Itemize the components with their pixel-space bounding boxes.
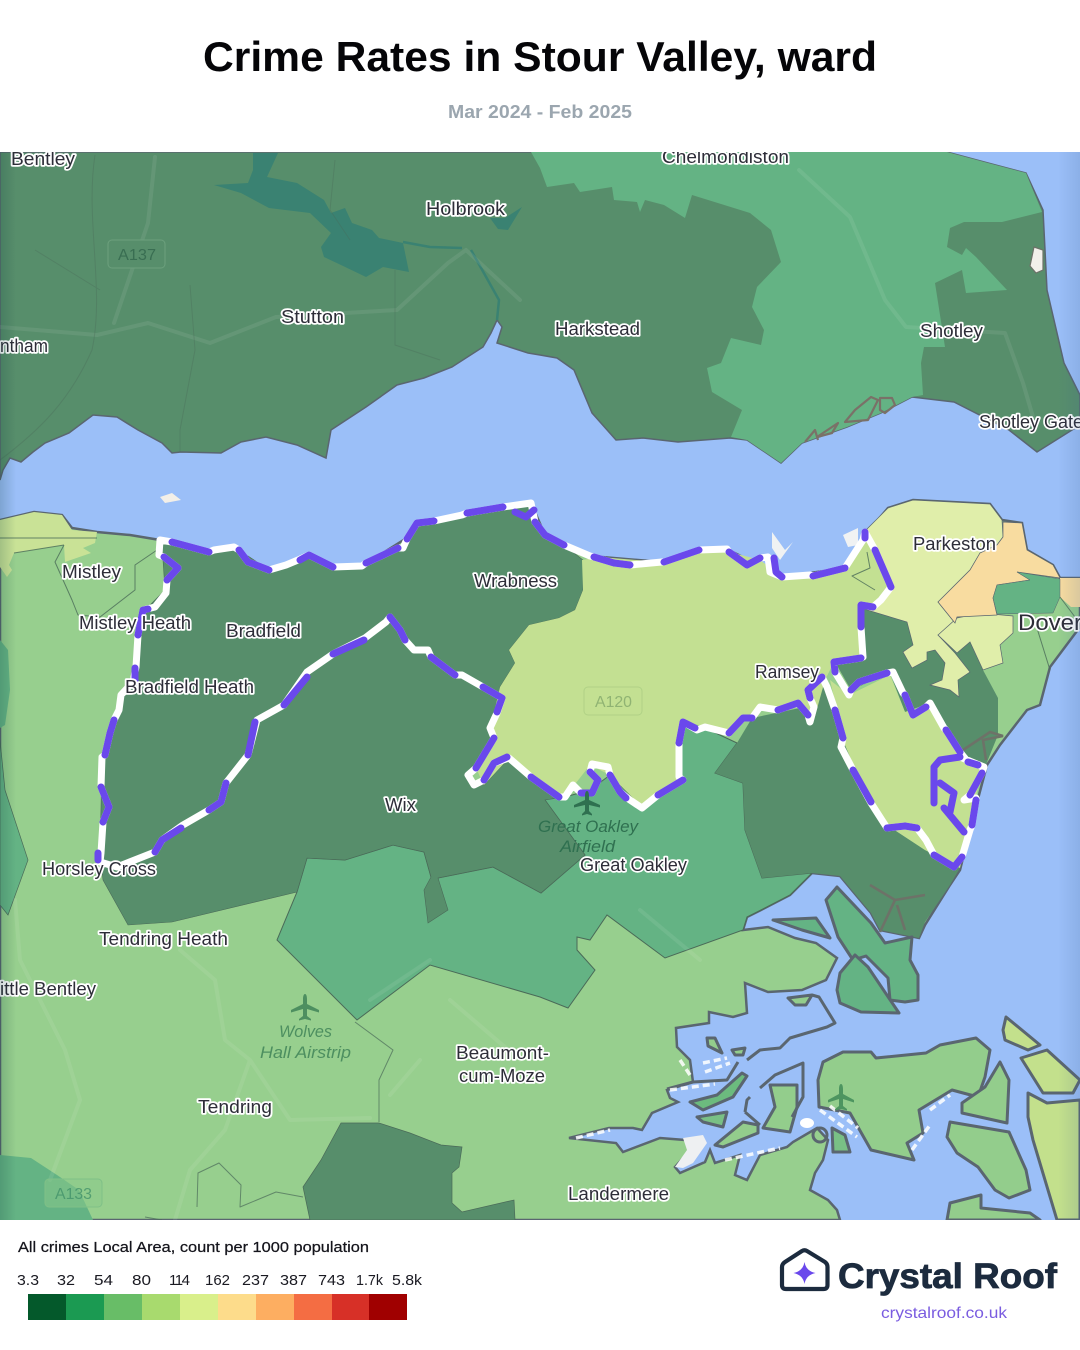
south-west corner mid green (0, 1155, 93, 1220)
label: Dover: Dover (1018, 610, 1080, 635)
north land: mid green ward (531, 152, 1042, 463)
label: Beaumont-cum-Moze: cum-Moze (459, 1066, 545, 1086)
title: Crime Rates in Stour Valley, ward (203, 33, 877, 80)
ring in marsh (813, 1128, 827, 1142)
label: Ramsey: Ramsey (755, 662, 819, 682)
label: Stutton: Stutton (281, 307, 344, 327)
reservoir: Alton Water (214, 153, 409, 277)
legend values: 114 (169, 1272, 190, 1289)
ward boundary: purple dashes (98, 507, 982, 867)
Dovercourt boundaries (852, 552, 1075, 670)
Dovercourt mid green patch (993, 572, 1060, 614)
Dovercourt orange area (938, 522, 1060, 623)
label: Landermere: Landermere (568, 1184, 669, 1204)
road badge: A120: A120 (595, 694, 632, 711)
bottom dark green ward (303, 1123, 515, 1220)
label: Wix: Wix (385, 795, 416, 815)
legend values: 3.3 (17, 1272, 39, 1289)
Mistley pale area (0, 512, 97, 577)
road badge: A120 (584, 687, 642, 715)
label: Wolves Hall Airstrip: Hall Airstrip (260, 1043, 351, 1062)
subtitle: date range: Mar 2024 - Feb 2025 (448, 101, 632, 122)
water background (0, 152, 1080, 1220)
legend values: 1.7k (356, 1272, 383, 1289)
legend values: 162 (205, 1272, 230, 1289)
ward boundary: white base (100, 503, 984, 867)
Mistley boundaries (0, 538, 160, 617)
label: Bradfield Heath: Bradfield Heath (125, 677, 254, 697)
label: Lawford fragment: ntham (0, 336, 48, 356)
Parkeston pale area (863, 500, 1003, 697)
label: Great Oakley: Great Oakley (580, 855, 687, 875)
icon: plane, Hamford island airstrip (828, 1084, 854, 1110)
label: Chelmondiston: Chelmondiston (662, 147, 789, 167)
label: Shotley: Shotley (920, 321, 983, 341)
east dark wedge (835, 607, 998, 767)
Dover edge orange area (1060, 578, 1080, 607)
icon: plane, Great Oakley Airfield (574, 791, 600, 816)
river channels north (403, 242, 499, 320)
west edge mid green strip (0, 640, 10, 728)
label: Beaumont-cum-Moze: Beaumont- (456, 1043, 549, 1063)
legend values: 387 (280, 1272, 307, 1289)
Ramsey south ward: dark green (715, 680, 960, 938)
road badge: A137 (108, 240, 165, 268)
mud flats (675, 1135, 707, 1168)
Dovercourt pale lobe (938, 613, 1013, 670)
label: Wrabness: Wrabness (474, 571, 557, 591)
south roads and boundaries (13, 898, 690, 1220)
icon: star (794, 1262, 816, 1284)
logo wordmark: Crystal Roof (838, 1257, 1057, 1296)
south main land base: light green (0, 500, 1080, 1220)
label: Mistley: Mistley (62, 562, 121, 582)
southern mid green wards (277, 722, 812, 1020)
logo website: crystalroof.co.uk (881, 1305, 1008, 1322)
legend title: All crimes Local Area, count per 1000 population (18, 1239, 369, 1256)
logo: Crystal Roof (782, 1250, 1057, 1322)
Stour Valley west ward: dark green (100, 503, 585, 925)
label: Beaumont-cum-Moze (456, 1043, 549, 1086)
legend (17, 1239, 423, 1320)
place labels (0, 147, 1080, 1204)
label: Wolves Hall Airstrip (260, 1022, 351, 1062)
yellow-green ward: east strip (830, 675, 982, 868)
label: Parkeston: Parkeston (913, 534, 996, 554)
legend colour scale (28, 1294, 407, 1320)
label: Tendring: Tendring (198, 1097, 272, 1117)
legend values: 54 (94, 1272, 113, 1289)
legend values: 5.8k (392, 1272, 423, 1289)
legend values: 237 (242, 1272, 269, 1289)
north land: Shotley peninsula dark area (0, 152, 1080, 480)
legend values (17, 1272, 423, 1289)
icon: house (782, 1250, 828, 1289)
pond near Holbrook (490, 207, 522, 230)
map edge fade left (0, 152, 16, 1220)
label: Great Oakley Airfield: Great Oakley (538, 817, 639, 836)
label: Bradfield: Bradfield (226, 621, 301, 641)
label: Holbrook: Holbrook (426, 199, 506, 219)
label: Great Oakley Airfield: Airfield (559, 837, 616, 856)
road badge: A133 (45, 1179, 102, 1207)
label: Bentley: Bentley (11, 149, 75, 169)
label: Little Bentley: ittle Bentley (0, 979, 96, 999)
label: Great Oakley Airfield (538, 817, 639, 856)
legend values: 743 (318, 1272, 345, 1289)
label: Harkstead: Harkstead (555, 319, 640, 339)
label: Horsley Cross: Horsley Cross (42, 859, 156, 879)
label: Tendring Heath: Tendring Heath (99, 929, 228, 949)
icon: plane, Wolves Hall Airstrip (291, 994, 319, 1020)
yellow-green ward: Ramsey (476, 535, 890, 805)
road badge: A133: A133 (55, 1186, 92, 1203)
north map roads and boundaries (0, 155, 1043, 460)
road badge: A137: A137 (118, 247, 156, 264)
west edge mid green strip lower (0, 740, 28, 915)
legend values: 32 (57, 1272, 75, 1289)
map edge fade right (1058, 152, 1080, 1220)
Hamford Water islands (160, 493, 1080, 1220)
label: Shotley Gate: Shotley Gate (979, 412, 1080, 432)
map panel (0, 147, 1080, 1220)
label: Mistley Heath: Mistley Heath (79, 613, 191, 633)
label: Wolves Hall Airstrip: Wolves (279, 1022, 332, 1041)
marsh lines (870, 732, 1003, 932)
legend values: 80 (132, 1272, 151, 1289)
